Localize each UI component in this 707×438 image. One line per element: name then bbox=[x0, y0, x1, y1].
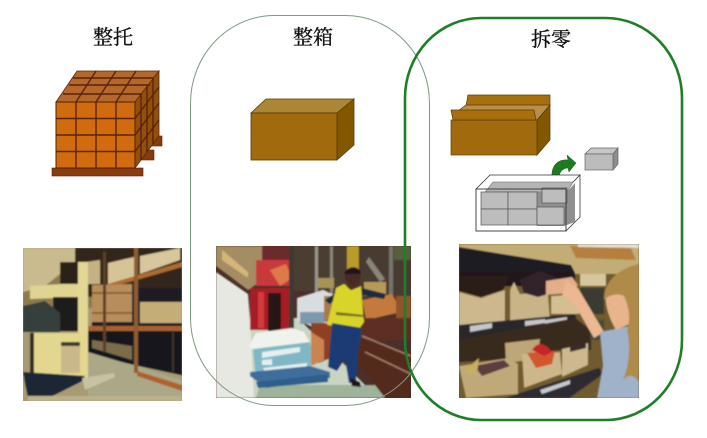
photo: worker with pallet of cases bbox=[216, 246, 411, 398]
front face of the stack bbox=[56, 102, 135, 168]
heading: split case: 拆零 bbox=[531, 28, 571, 51]
icon: pallet of stacked cartons bbox=[52, 71, 162, 176]
icon: open case of gray units bbox=[476, 175, 580, 231]
heading: full pallet: 整托 bbox=[93, 26, 133, 49]
side face of the stack bbox=[135, 71, 159, 168]
icon: open carton bbox=[451, 95, 550, 155]
icon: closed carton bbox=[251, 99, 354, 160]
oval outline: split case group bbox=[405, 18, 682, 420]
icon: pallet bases bbox=[52, 136, 162, 176]
oval outline: full case group bbox=[190, 16, 430, 406]
icon: single gray unit bbox=[585, 148, 618, 170]
photo: forklift in warehouse bbox=[23, 248, 182, 401]
photo: woman picking from shelves bbox=[459, 244, 639, 398]
heading: full case: 整箱 bbox=[293, 26, 333, 49]
icon: curved green arrow bbox=[552, 155, 576, 178]
top face of the stack bbox=[56, 71, 159, 102]
